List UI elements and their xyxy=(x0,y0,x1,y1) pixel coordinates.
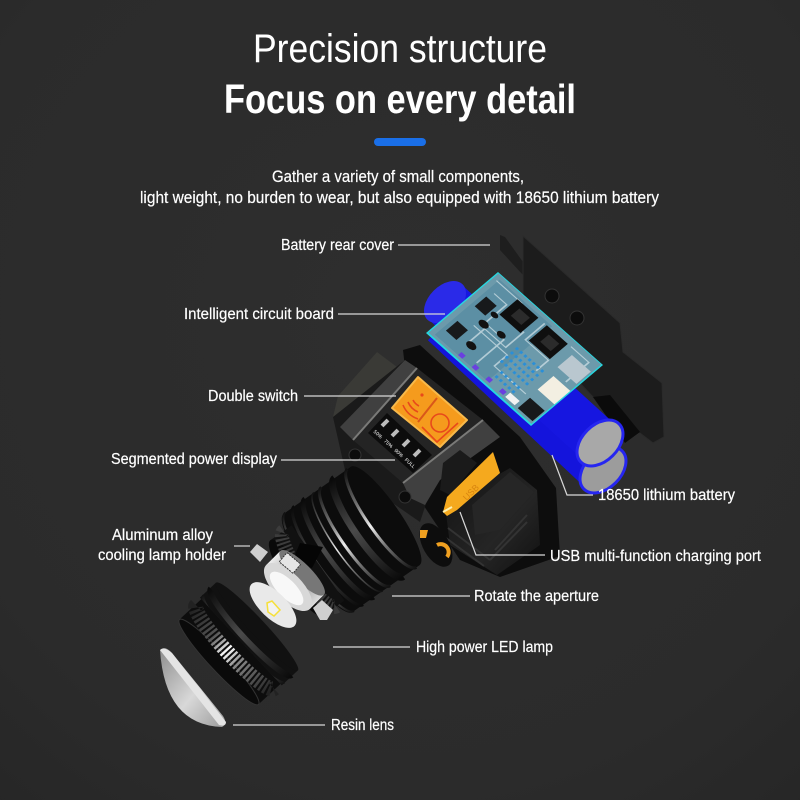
accent bar xyxy=(374,138,426,146)
orange clips xyxy=(413,518,459,572)
aluminum cooling lamp holder xyxy=(250,544,333,620)
USB flap xyxy=(440,450,500,516)
segmented power display: 50% xyxy=(372,429,384,441)
intro text: light weight, no burden to wear, but also equipped with 18650 lithium battery xyxy=(140,189,660,207)
title: line two: Focus on every detail xyxy=(224,76,576,122)
purple parts xyxy=(458,352,507,395)
rear bracket xyxy=(403,345,560,577)
leader lines xyxy=(233,245,593,725)
segmented power display: 75% xyxy=(382,439,394,450)
callout labels: cooling lamp holder xyxy=(98,547,226,564)
segmented power display: FULL xyxy=(403,457,416,470)
callout labels: Resin lens xyxy=(331,717,394,734)
callout labels: Aluminum alloy xyxy=(112,527,213,544)
rear housing xyxy=(333,352,397,427)
callout labels: Intelligent circuit board xyxy=(184,306,334,323)
callout labels xyxy=(98,237,762,734)
callout labels: Double switch xyxy=(208,388,298,405)
push switches xyxy=(499,299,568,359)
callout labels: 18650 lithium battery xyxy=(598,487,735,504)
callout labels: Rotate the aperture xyxy=(474,588,599,605)
callout labels: Battery rear cover xyxy=(281,237,394,254)
segmented power display xyxy=(368,413,432,473)
double switch buttons xyxy=(392,377,467,447)
callout labels: High power LED lamp xyxy=(416,639,553,656)
main housing xyxy=(333,360,500,522)
title: line one: Precision structure xyxy=(253,27,547,71)
lens ring xyxy=(171,577,304,712)
USB socket and mesh xyxy=(538,376,570,404)
callout labels: Segmented power display xyxy=(111,451,277,468)
circuit board xyxy=(426,272,603,426)
lower body block xyxy=(445,468,540,575)
barrel ring highlights xyxy=(274,469,416,619)
chips xyxy=(438,297,581,421)
USB flap: USB xyxy=(461,482,481,502)
capacitors xyxy=(458,309,515,359)
intro text: Gather a variety of small components, xyxy=(272,168,524,186)
resistors xyxy=(489,348,543,395)
battery rear cover xyxy=(500,235,664,443)
intro text xyxy=(140,168,660,207)
barrel slot xyxy=(292,543,323,568)
rotating aperture barrel xyxy=(253,459,431,633)
exploded headlamp illustration xyxy=(160,235,664,727)
lithium batteries xyxy=(416,273,635,502)
high power LED lamp xyxy=(242,575,304,635)
resin lens xyxy=(160,648,226,727)
segmented power display: 90% xyxy=(393,448,405,459)
callout labels: USB multi-function charging port xyxy=(550,548,762,565)
